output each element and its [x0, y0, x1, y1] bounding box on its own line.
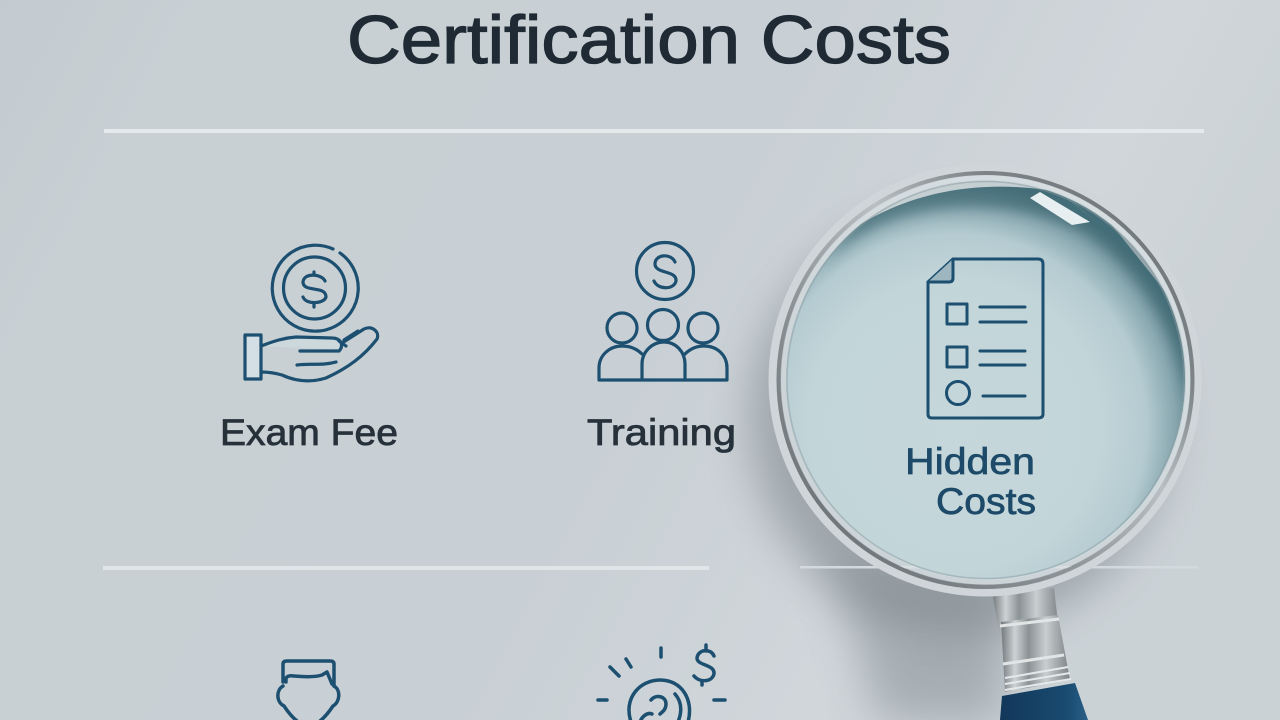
- lens rim: [778, 173, 1192, 587]
- title: Certification Costs: [347, 2, 951, 78]
- label: hidden costs: Hidden: [905, 441, 1035, 482]
- lens: [786, 180, 1186, 580]
- magnifying glass: [773, 150, 1210, 720]
- label: exam fee: Exam Fee: [220, 412, 398, 453]
- icon: exam fee coin in hand: [245, 245, 378, 381]
- icon: hidden costs checklist: [928, 259, 1043, 418]
- icon: training group with coin: [599, 242, 727, 380]
- label: hidden costs: [905, 441, 1036, 522]
- outer glass lip: [773, 168, 1197, 592]
- icon: partial idea with dollar: [598, 645, 725, 720]
- label: hidden costs: Costs: [936, 481, 1036, 522]
- magnifier cast shadow: [750, 210, 1170, 720]
- handle: [992, 588, 1088, 720]
- icon: partial person head: [278, 661, 339, 720]
- label: training: Training: [587, 412, 736, 453]
